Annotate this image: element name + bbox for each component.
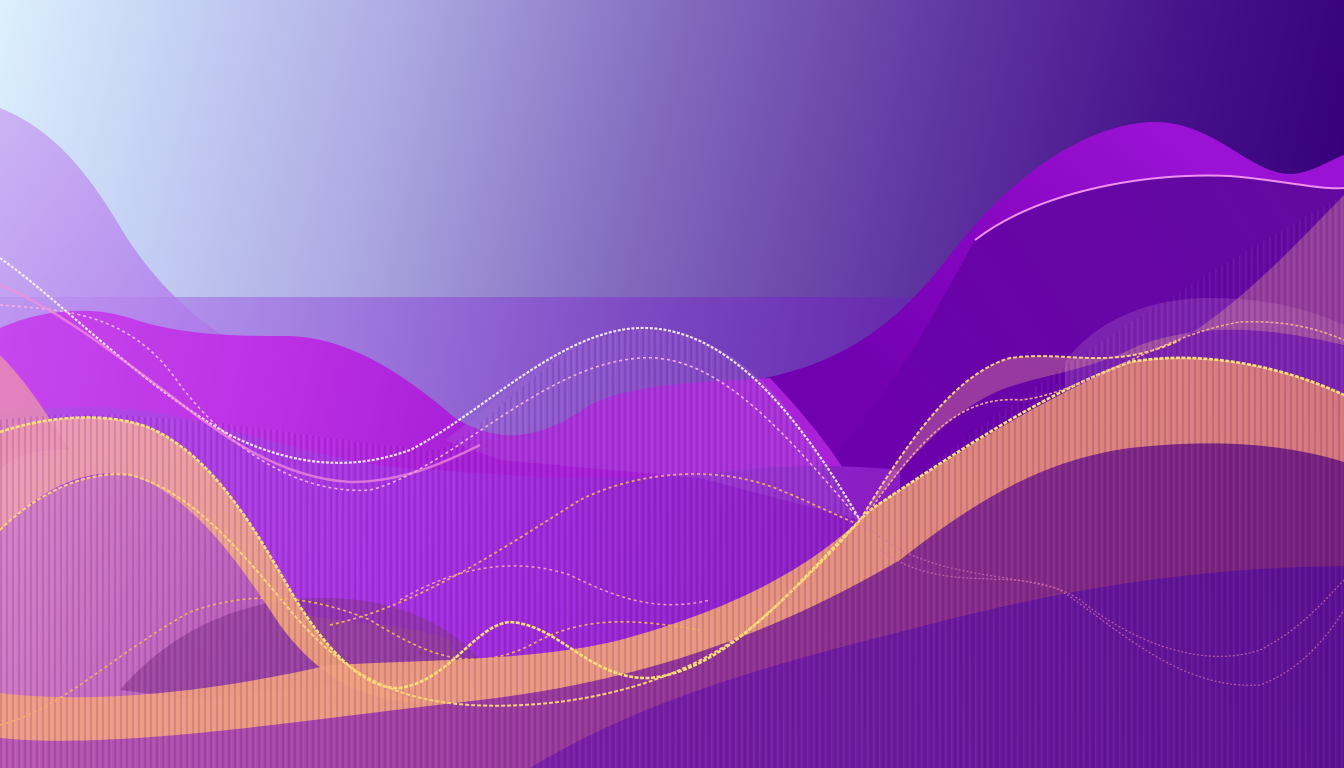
left orange ribbon xyxy=(0,417,430,702)
right wave highlight line xyxy=(975,175,1344,240)
translucent lilac hill behind dotted arc xyxy=(445,330,860,520)
horizon band xyxy=(0,297,1344,768)
faint mesh line one xyxy=(860,520,1344,685)
lower dim wave xyxy=(120,598,480,700)
upper right translucent mesh ribbon xyxy=(860,195,1344,520)
central violet body xyxy=(0,407,900,768)
main orange ribbon xyxy=(0,358,1344,741)
yellow dotted main ribbon top xyxy=(0,358,1344,688)
dotted white arc line xyxy=(0,258,860,520)
orange dotted mid line xyxy=(330,474,860,625)
orange dotted thin lower left line xyxy=(0,598,700,725)
bottom right deep purple xyxy=(530,566,1344,768)
yellow dotted lower line xyxy=(0,340,1180,706)
upper right orange line xyxy=(870,322,1344,510)
right purple wave xyxy=(765,122,1344,768)
magenta left wave xyxy=(0,311,850,620)
orange dotted wave mid xyxy=(400,566,710,605)
vertical stripe texture xyxy=(0,195,1344,768)
faint mesh line two xyxy=(880,550,1344,656)
pink left hill xyxy=(0,474,480,768)
top left translucent wave xyxy=(0,108,460,500)
right translucent hump xyxy=(1065,298,1344,470)
dotted inner arc line xyxy=(0,305,860,520)
left edge pink ribbon xyxy=(0,355,70,470)
right secondary dark fold xyxy=(820,175,1344,560)
under-ribbon purple ground xyxy=(0,443,1344,768)
lower right faint mesh lines xyxy=(860,520,1344,685)
pink highlight line xyxy=(0,285,480,482)
